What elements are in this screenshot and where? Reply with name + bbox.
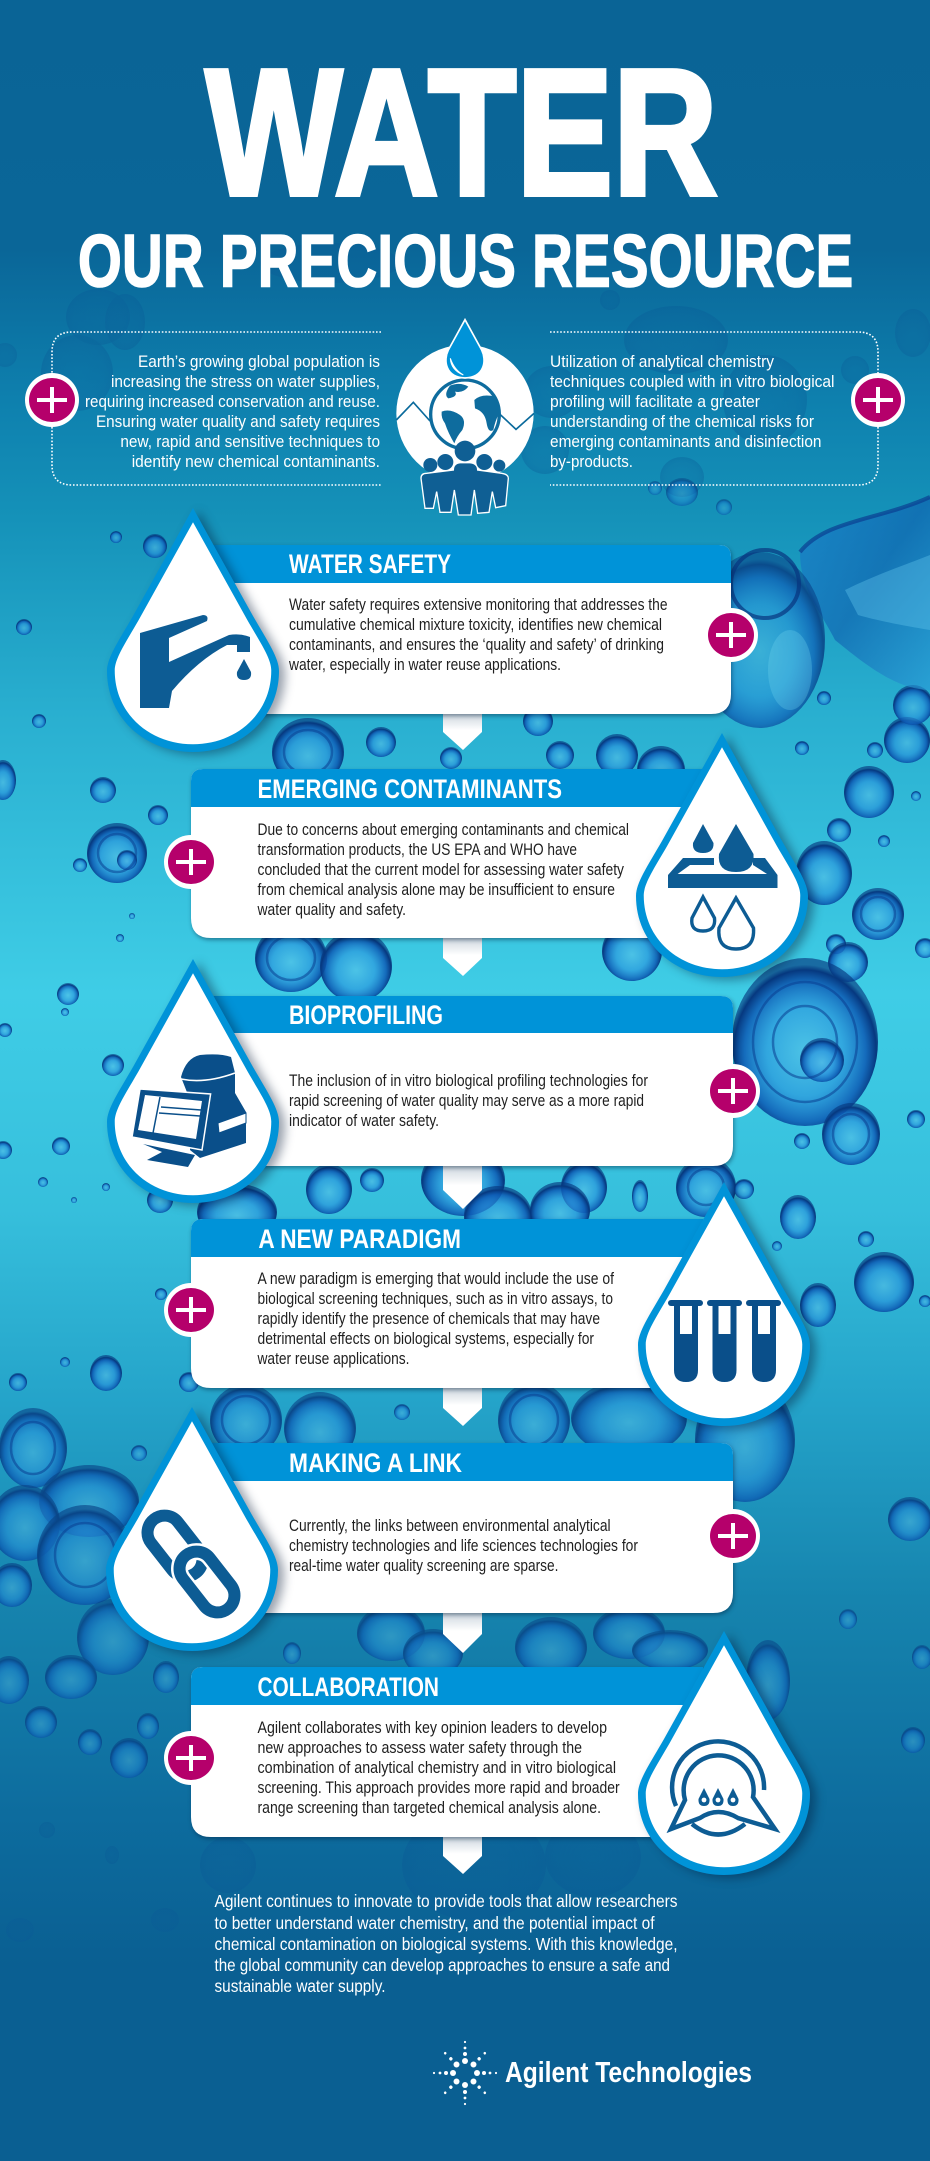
- heading: water safety: WATER SAFETY: [289, 549, 451, 579]
- plus button: [704, 608, 758, 662]
- closing text block: the global community can develop approaches to ensure a safe and: [214, 1955, 670, 1975]
- text: emerging contaminants: water quality and safety.: [257, 901, 406, 919]
- panel: intro left: Ensuring water quality and safety requires: [96, 413, 380, 431]
- arrow 4: [443, 1388, 482, 1426]
- heading band: water safety: [205, 545, 731, 583]
- subtitle: OUR PRECIOUS RESOURCE: OUR PRECIOUS RESOURCE: [78, 220, 853, 302]
- arrow 1: [443, 714, 482, 750]
- text: collaboration: new approaches to assess water safety through the: [258, 1739, 582, 1757]
- panel: emerging contaminants: [164, 769, 703, 938]
- panel: intro right: Utilization of analytical chemistry: [550, 353, 775, 371]
- arrow 3: [443, 1166, 482, 1209]
- title: WATER: WATER: [206, 32, 718, 234]
- icon: globe, water drop and people: [396, 320, 534, 515]
- panel: intro right: understanding of the chemical risks for: [550, 413, 814, 431]
- panel: intro left: [25, 332, 381, 485]
- text: a new paradigm: water reuse applications.: [257, 1350, 410, 1368]
- closing text block: sustainable water supply.: [214, 1976, 386, 1996]
- drop icon: chain link: [106, 1407, 278, 1651]
- arrow 2: [443, 938, 482, 976]
- icon: starburst: [433, 2041, 497, 2105]
- heading band: bioprofiling: [205, 996, 733, 1033]
- plus button: [164, 1731, 218, 1785]
- drop icon: instrument and monitor: [107, 959, 279, 1203]
- text: emerging contaminants: transformation products, the US EPA and WHO have: [258, 841, 577, 859]
- plus button: [706, 1509, 760, 1563]
- panel: intro left: increasing the stress on water supplies,: [111, 373, 380, 391]
- panel: intro left: new, rapid and sensitive techniques to: [120, 433, 380, 451]
- panel: collaboration: [164, 1667, 703, 1837]
- logo: Agilent Technologies: [433, 2041, 752, 2105]
- heading band: emerging contaminants: [191, 769, 703, 807]
- heading: making a link: MAKING A LINK: [289, 1448, 462, 1478]
- heading band: a new paradigm: [191, 1219, 703, 1257]
- text: emerging contaminants: concluded that the current model for assessing water safety: [258, 861, 625, 879]
- drop icon: test tubes: [638, 1182, 810, 1426]
- closing text block: to better understand water chemistry, and the potential impact of: [214, 1913, 655, 1933]
- arrow 5: [443, 1613, 482, 1653]
- text: collaboration: screening. This approach provides more rapid and broader: [258, 1779, 620, 1797]
- heading band: making a link: [205, 1443, 733, 1481]
- text: making a link: real-time water quality screening are sparse.: [289, 1557, 558, 1575]
- text: emerging contaminants: from chemical analysis alone may be insufficient to ensure: [258, 881, 615, 899]
- text: collaboration: Agilent collaborates with key opinion leaders to develop: [258, 1719, 607, 1737]
- panel: intro right: emerging contaminants and disinfection: [550, 433, 822, 451]
- text: bioprofiling: rapid screening of water quality may serve as a more rapid: [289, 1092, 644, 1110]
- text: a new paradigm: detrimental effects on biological systems, especially for: [258, 1330, 594, 1348]
- text: a new paradigm: rapidly identify the presence of chemicals that may have: [258, 1310, 600, 1328]
- panel: intro left: identify new chemical contaminants.: [132, 453, 380, 471]
- panel: making a link: [205, 1443, 760, 1613]
- closing text block: Agilent continues to innovate to provide tools that allow researchers: [214, 1891, 678, 1911]
- heading: emerging contaminants: EMERGING CONTAMINANTS: [258, 774, 562, 804]
- text: bioprofiling: [289, 1072, 648, 1130]
- text: bioprofiling: The inclusion of in vitro biological profiling technologies for: [289, 1072, 648, 1090]
- drop icon: faucet: [107, 508, 279, 752]
- arrow 6: [443, 1837, 482, 1874]
- text: making a link: Currently, the links between environmental analytical: [289, 1517, 611, 1535]
- panel: intro left: Earth’s growing global population is: [138, 353, 380, 371]
- text: making a link: chemistry technologies and life sciences technologies for: [289, 1537, 638, 1555]
- text: collaboration: combination of analytical chemistry and in vitro biological: [258, 1759, 616, 1777]
- text: making a link: [289, 1517, 638, 1575]
- text: collaboration: range screening than targeted chemical analysis alone.: [258, 1799, 601, 1817]
- closing text block: chemical contamination on biological systems. With this knowledge,: [214, 1934, 678, 1954]
- text: water safety: contaminants, and ensures the ‘quality and safety’ of drinking: [289, 636, 664, 654]
- heading: a new paradigm: A NEW PARADIGM: [258, 1224, 461, 1254]
- panel: water safety: [205, 545, 758, 714]
- plus button: [164, 835, 218, 889]
- plus button: [164, 1283, 218, 1337]
- panel: intro right: by-products.: [550, 453, 633, 471]
- text: a new paradigm: [257, 1270, 614, 1368]
- text: water safety: Water safety requires extensive monitoring that addresses the: [289, 596, 668, 614]
- panel: intro right: profiling will facilitate a greater: [550, 393, 760, 411]
- heading band: collaboration: [191, 1667, 703, 1705]
- panel: intro right: [550, 332, 905, 485]
- panel: bioprofiling: [205, 996, 760, 1166]
- text: water safety: [288, 596, 668, 674]
- text: a new paradigm: A new paradigm is emerging that would include the use of: [258, 1270, 614, 1288]
- text: emerging contaminants: Due to concerns about emerging contaminants and chemical: [258, 821, 629, 839]
- drop icon: filter with droplets: [636, 733, 808, 977]
- text: emerging contaminants: [257, 821, 629, 919]
- logo: Agilent Technologies: Agilent Technologies: [505, 2057, 752, 2089]
- text: water safety: cumulative chemical mixture toxicity, identifies new chemical: [289, 616, 662, 634]
- text: a new paradigm: biological screening techniques, such as in vitro assays, to: [258, 1290, 613, 1308]
- closing text block: [214, 1891, 678, 1996]
- text: bioprofiling: indicator of water safety.: [289, 1112, 439, 1130]
- text: water safety: water, especially in water reuse applications.: [288, 656, 561, 674]
- heading: bioprofiling: BIOPROFILING: [289, 1000, 443, 1030]
- heading: collaboration: COLLABORATION: [258, 1672, 439, 1702]
- text: collaboration: [258, 1719, 620, 1817]
- drop icon: speech bubble with droplets: [638, 1631, 810, 1875]
- panel: a new paradigm: [164, 1219, 703, 1388]
- panel: intro left: requiring increased conservation and reuse.: [85, 393, 380, 411]
- plus button: [706, 1064, 760, 1118]
- panel: intro right: techniques coupled with in vitro biological: [550, 373, 834, 391]
